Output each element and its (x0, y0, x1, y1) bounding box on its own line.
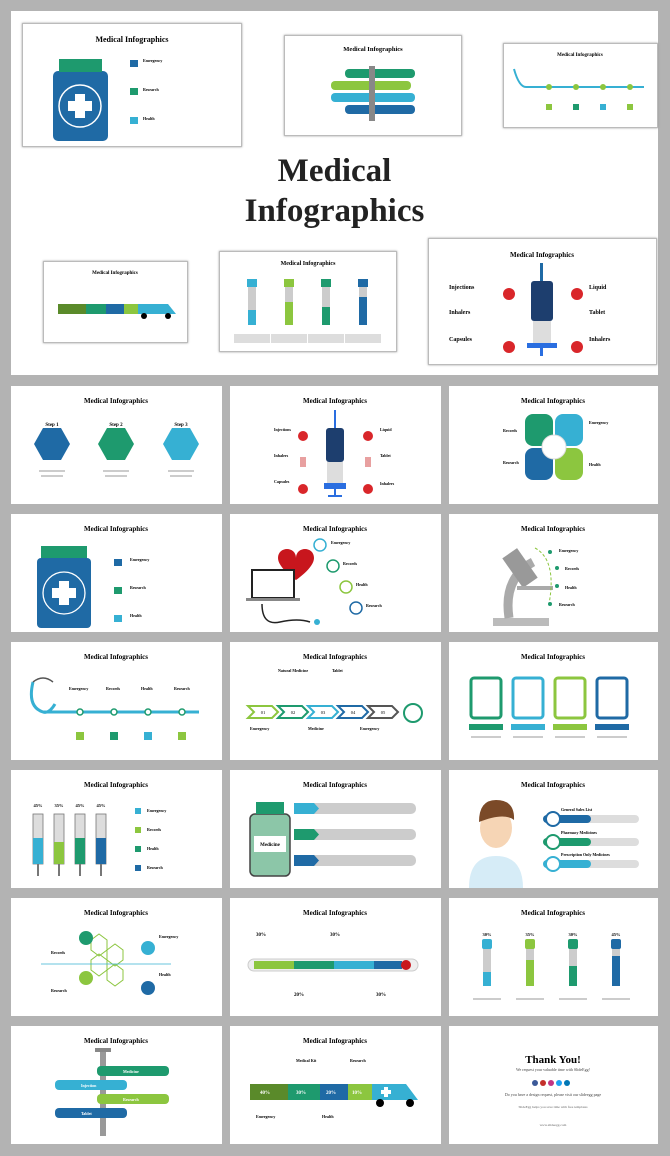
tile: T stacked bars (11, 1026, 222, 1144)
tile: thank you: Do you have a design request, please visit our slideegg page (505, 1092, 601, 1098)
hero slide: bottle: Emergency (143, 58, 162, 63)
tile: heart laptop: Medical Infographics (303, 525, 367, 533)
tile: four syringes: 45% (96, 803, 106, 808)
tile: droppers (449, 898, 658, 1016)
tile: ambulance bar: 10% (352, 1091, 362, 1096)
hero slide: syringe: Liquid (589, 285, 607, 291)
hero slide: syringe: Injections (449, 285, 475, 291)
tile: thank you: www.slideegg.com (540, 1123, 567, 1127)
tile: stethoscope timeline: Medical Infographics (84, 653, 148, 661)
tile: bottle: Medical Infographics (84, 525, 148, 533)
tile: hexagon chain: Emergency (159, 934, 178, 939)
tile: bottle: Research (130, 585, 146, 590)
tile: four rounded squares: Records (503, 428, 517, 433)
tile: syringe: Inhalers (274, 453, 289, 458)
tile: bottle bars: Medicine (260, 843, 281, 848)
tile: four syringes: 35% (54, 803, 64, 808)
tile: bottle bars (230, 770, 441, 888)
tile: stethoscope timeline: Health (141, 686, 153, 691)
tile: hexagon chain: Medical Infographics (84, 909, 148, 917)
tile: microscope: Health (565, 585, 577, 590)
tile: steps hexagons: Step 2 (109, 423, 123, 428)
tile: ambulance bar: Health (322, 1114, 334, 1119)
tile: heart laptop: Records (343, 561, 357, 566)
tile: T stacked bars: Injection (81, 1083, 97, 1088)
tile: ambulance bar: Research (350, 1058, 366, 1063)
tile: tags (449, 642, 658, 760)
tile: T stacked bars: Medicine (123, 1069, 139, 1074)
tile: syringe: Inhalers (380, 481, 395, 486)
hero slide: droppers (219, 251, 397, 352)
hero slide: stethoscope (503, 43, 658, 128)
hero slide: syringe: Inhalers (449, 310, 471, 316)
tile: chevrons: Tablet (332, 668, 343, 673)
tile: hexagon chain: Research (51, 988, 67, 993)
tile: doctor: General Sales List (561, 807, 593, 812)
hero slide: injection: Medical Infographics (343, 46, 403, 53)
tile: chevrons: 04 (351, 710, 356, 715)
tile: four syringes (11, 770, 222, 888)
tile: steps hexagons (11, 386, 222, 504)
title: Infographics (245, 193, 424, 229)
hero slide: stethoscope: Medical Infographics (557, 53, 603, 58)
tile: thank you: We request your valuable time with SlideEgg! (516, 1067, 590, 1072)
tile: thermometer: 30% (376, 993, 386, 998)
tile: four syringes: Emergency (147, 808, 166, 813)
tile: chevrons: 03 (321, 710, 326, 715)
tile: stethoscope timeline: Records (106, 686, 120, 691)
tile: chevrons: Natural Medicine (278, 668, 308, 673)
tile: bottle: Health (130, 613, 142, 618)
tile: chevrons: Medicine (308, 726, 324, 731)
tile: chevrons: 05 (381, 710, 386, 715)
hero slide: syringe: Tablet (589, 310, 605, 316)
tile: T stacked bars: Research (123, 1097, 139, 1102)
hero slide: ambulance bar: Medical Infographics (92, 271, 138, 276)
tile: microscope: Emergency (559, 548, 578, 553)
tile: microscope (449, 514, 658, 632)
tile: chevrons: 01 (261, 710, 265, 715)
tile: hexagon chain (11, 898, 222, 1016)
tile: stethoscope timeline: Research (174, 686, 190, 691)
tile: doctor: Medical Infographics (521, 781, 585, 789)
title (245, 153, 424, 229)
tile: tags: Medical Infographics (521, 653, 585, 661)
tile: stethoscope timeline (11, 642, 222, 760)
tile: ambulance bar: Medical Infographics (303, 1037, 367, 1045)
tile: four syringes: Research (147, 865, 163, 870)
tile: four rounded squares: Research (503, 460, 519, 465)
tile: four syringes: Medical Infographics (84, 781, 148, 789)
tile: four rounded squares: Health (589, 462, 601, 467)
tile: syringe: Medical Infographics (303, 397, 367, 405)
tile: steps hexagons: Step 1 (45, 423, 59, 428)
tile: T stacked bars: Medical Infographics (84, 1037, 148, 1045)
tile: bottle (11, 514, 222, 632)
tile: bottle: Emergency (130, 557, 149, 562)
tile: steps hexagons: Step 3 (174, 423, 188, 428)
tile: thank you: SlideEgg helps you save time with free templates (518, 1105, 588, 1109)
tile: ambulance bar: 30% (296, 1091, 306, 1096)
tile: droppers: Medical Infographics (521, 909, 585, 917)
tile: chevrons: Emergency (360, 726, 379, 731)
tile: doctor (449, 770, 658, 888)
tile: syringe: Liquid (380, 427, 392, 432)
tile: hexagon chain: Health (159, 972, 171, 977)
tile: chevrons: Medical Infographics (303, 653, 367, 661)
tile: hexagon chain: Records (51, 950, 65, 955)
hero slide: syringe: Inhalers (589, 337, 611, 343)
tile: ambulance bar: 40% (260, 1091, 270, 1096)
tile: four syringes: 45% (34, 803, 43, 808)
tile: heart laptop: Research (366, 603, 382, 608)
tile: four rounded squares: Medical Infographics (521, 397, 585, 405)
hero slide: syringe: Capsules (449, 337, 473, 343)
tile: thermometer (230, 898, 441, 1016)
hero slide: ambulance bar (43, 261, 188, 343)
tile: ambulance bar: Medical Kit (296, 1058, 317, 1063)
tile: heart laptop: Health (356, 582, 368, 587)
tile: microscope: Research (559, 602, 575, 607)
tile: four rounded squares (449, 386, 658, 504)
hero slide: bottle (22, 23, 242, 147)
tile: chevrons: Emergency (250, 726, 269, 731)
title: Medical (278, 153, 391, 189)
tile: doctor: Prescription Only Medicines (561, 852, 610, 857)
tile: stethoscope timeline: Emergency (69, 686, 88, 691)
tile: four syringes: Records (147, 827, 161, 832)
tile: chevrons: 02 (291, 710, 295, 715)
tile: heart laptop: Emergency (331, 540, 350, 545)
tile: syringe (230, 386, 441, 504)
tile: syringe: Tablet (380, 453, 391, 458)
hero slide: syringe (428, 238, 657, 365)
tile: ambulance bar: Emergency (256, 1114, 275, 1119)
tile: syringe: Capsules (274, 479, 290, 484)
tile: microscope: Records (565, 566, 579, 571)
tile: steps hexagons: Medical Infographics (84, 397, 148, 405)
hero slide: syringe: Medical Infographics (510, 251, 574, 259)
tile: bottle bars: Medical Infographics (303, 781, 367, 789)
tile: ambulance bar (230, 1026, 441, 1144)
tile: T stacked bars: Tablet (81, 1111, 92, 1116)
tile: chevrons (230, 642, 441, 760)
tile: droppers: 45% (612, 932, 621, 937)
tile: four syringes: 45% (76, 803, 85, 808)
tile: thermometer: 30% (330, 933, 340, 938)
tile: doctor: Pharmacy Medicines (561, 830, 597, 835)
tile: syringe: Injections (274, 427, 291, 432)
tile: four syringes: Health (147, 846, 159, 851)
hero slide: bottle: Research (143, 87, 159, 92)
tile: ambulance bar: 20% (326, 1091, 336, 1096)
tile: thank you: Thank You! (525, 1054, 581, 1066)
tile: thermometer: 30% (256, 933, 266, 938)
hero slide: bottle: Health (143, 116, 155, 121)
hero slide: injection (284, 35, 462, 136)
tile: thermometer: Medical Infographics (303, 909, 367, 917)
tile: thermometer: 20% (294, 993, 304, 998)
tile: heart laptop (230, 514, 441, 632)
tile: thank you (449, 1026, 658, 1144)
hero slide: bottle: Medical Infographics (95, 35, 169, 44)
tile: droppers: 30% (482, 932, 492, 937)
tile: microscope: Medical Infographics (521, 525, 585, 533)
tile: droppers: 35% (526, 932, 535, 937)
hero slide: droppers: Medical Infographics (281, 261, 336, 267)
hero panel (11, 11, 658, 375)
tile: four rounded squares: Emergency (589, 420, 608, 425)
tile: droppers: 30% (568, 932, 578, 937)
